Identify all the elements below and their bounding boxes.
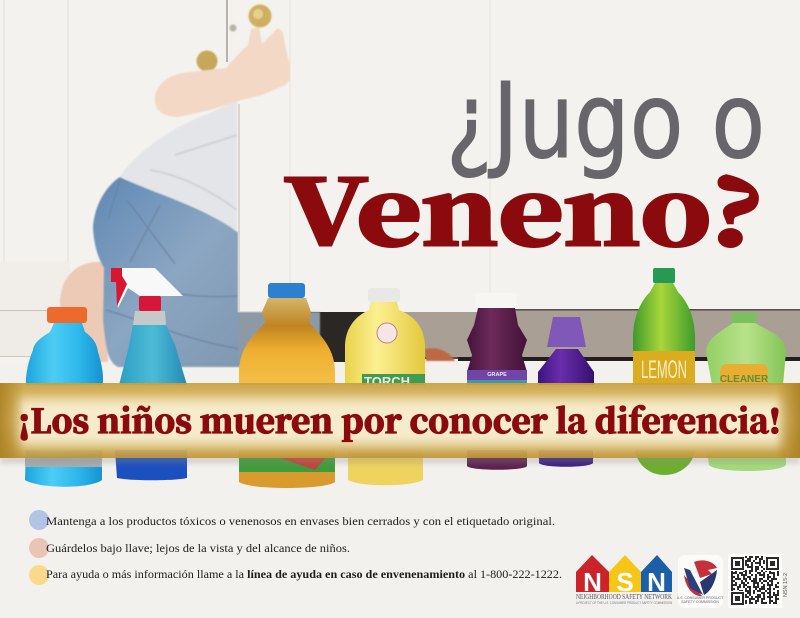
bottle: torch yellow oil bbox=[345, 288, 425, 485]
knobs and latch bbox=[196, 50, 218, 72]
title: Veneno?: Veneno? bbox=[285, 141, 764, 271]
child reaching for the cabinet bbox=[60, 4, 455, 367]
tip 1: Mantenga a los productos tóxicos o venenosos en envases bien cerrados y con el etiquetado original. bbox=[46, 514, 555, 528]
bottle: purple medicine bbox=[538, 317, 594, 467]
tip 2 bbox=[29, 538, 350, 558]
banner shadow bbox=[0, 456, 800, 463]
arm and hand bbox=[155, 27, 290, 117]
CPSC seal bbox=[677, 555, 724, 608]
jeans bbox=[93, 177, 258, 367]
bottle: blue sports drink bbox=[25, 307, 103, 487]
bottle: lemon drink: LEMON bbox=[641, 356, 687, 384]
NSN logo bbox=[576, 555, 672, 605]
toes bbox=[425, 348, 455, 361]
banner text: ¡Los niños mueren por conocer la diferencia! bbox=[18, 396, 781, 443]
CPSC seal: SAFETY COMMISSION bbox=[681, 600, 719, 604]
bottle: apple juice bbox=[239, 283, 335, 488]
baseboard gap under door bbox=[300, 309, 800, 362]
bottle: spray cleaner bbox=[111, 268, 187, 480]
NSN logo: S bbox=[616, 567, 634, 597]
bottle: grape juice: GRAPE bbox=[487, 372, 507, 378]
bottle: green cleaner bbox=[706, 312, 786, 471]
tip 2: Guárdelos bajo llave; lejos de la vista y del alcance de niños. bbox=[46, 541, 350, 555]
NSN logo: N bbox=[647, 567, 666, 597]
CPSC seal: U.S. CONSUMER PRODUCT bbox=[677, 596, 724, 600]
NSN logo: A PROJECT OF THE U.S. CONSUMER PRODUCT SAFETY COMMISSION bbox=[576, 601, 672, 605]
shirt bbox=[120, 100, 237, 232]
bottle: grape juice bbox=[467, 293, 527, 470]
bottle: green cleaner: CLEANER bbox=[720, 374, 769, 385]
open cabinet door edge bbox=[238, 104, 240, 312]
QR code bbox=[728, 554, 782, 608]
NSN logo: N bbox=[583, 567, 602, 597]
tip 3: Para ayuda o más información llame a la línea de ayuda en caso de envenenamiento al 1-800-222-1222. bbox=[46, 567, 562, 581]
tip 1 bbox=[29, 510, 555, 530]
bottle: lemon drink bbox=[633, 268, 695, 475]
bottles row bbox=[25, 268, 786, 488]
tip 3 bbox=[29, 565, 562, 585]
NSN logo: NEIGHBORHOOD SAFETY NETWORK bbox=[576, 593, 672, 601]
tips list bbox=[29, 510, 562, 585]
document code: NSN 15-2 bbox=[783, 573, 789, 597]
leg and foot skin bbox=[60, 262, 108, 362]
bottle: torch yellow oil: TORCH bbox=[364, 374, 410, 389]
gold banner bbox=[0, 383, 800, 458]
